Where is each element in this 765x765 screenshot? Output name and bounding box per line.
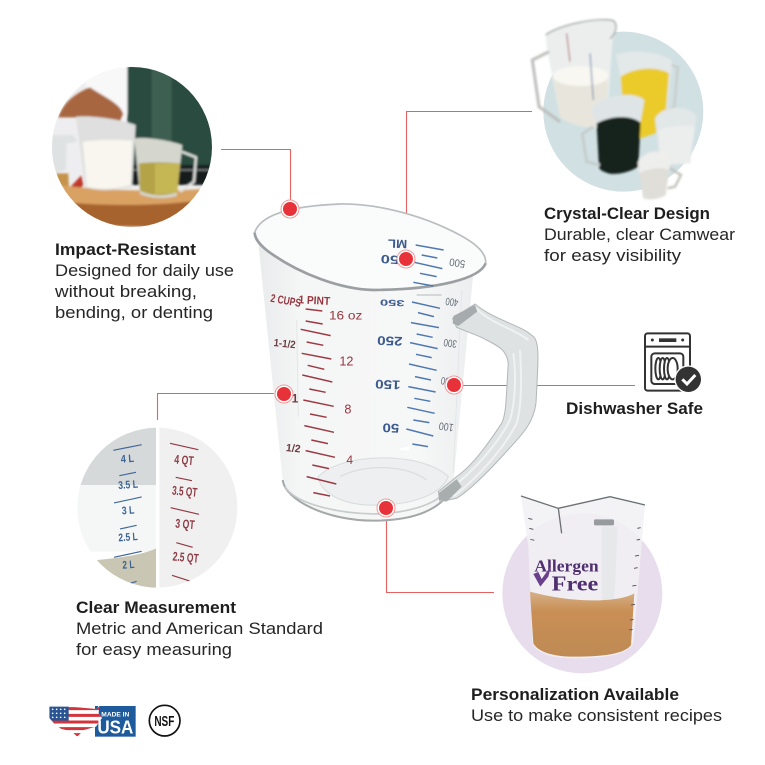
cup handle — [438, 304, 538, 502]
gray cup labels — [438, 255, 466, 433]
text: crystal-clear description: Durable, clear Camwear — [544, 225, 735, 244]
panel: measurement markings close-up — [77, 427, 239, 590]
gray cup labels: 100 — [438, 419, 454, 433]
red cup labels: 1-1/2 — [273, 337, 296, 351]
callout dot: personalization — [377, 499, 395, 517]
blue cup labels: 350 — [379, 297, 405, 308]
callout dot: impact-resistant — [281, 200, 299, 218]
text: clear measurement description: Metric and American Standard — [76, 619, 323, 638]
allergen free mark: Free — [552, 573, 598, 595]
red ticks — [301, 309, 336, 496]
measuring cup — [255, 204, 538, 521]
gray cup labels: 300 — [443, 336, 458, 350]
panel: personalization photo — [502, 496, 662, 673]
text: impact-resistant description — [54, 261, 234, 322]
panel: measurement markings close-up: 3 QT — [175, 517, 195, 532]
text: impact-resistant description: bending, or denting — [55, 303, 213, 322]
red cup labels: 4 — [346, 453, 353, 467]
panel: measurement markings close-up: 2.5 QT — [172, 550, 199, 566]
text: personalization description: Use to make consistent recipes — [471, 706, 722, 725]
heading: Impact-Resistant: Impact-Resistant — [55, 240, 196, 259]
callout dot: crystal-clear — [397, 250, 415, 268]
text: clear measurement description — [76, 619, 323, 659]
gray cup labels: 500 — [448, 255, 466, 270]
icon: dishwasher — [645, 333, 702, 393]
glass cup — [521, 496, 645, 658]
text: crystal-clear description — [544, 225, 735, 265]
red cup labels: 8 — [344, 402, 351, 416]
blue cup labels: ML — [388, 236, 407, 251]
panel: impact-resistant photo — [50, 63, 217, 230]
badge: NSF: NSF — [154, 714, 174, 730]
panel: measurement markings close-up: 3 L — [121, 505, 135, 517]
blue cup labels: 50 — [380, 252, 400, 267]
panel: measurement markings close-up: 2 L — [122, 559, 135, 572]
cup body — [258, 243, 473, 520]
text: crystal-clear description: for easy visibility — [544, 246, 682, 265]
blue cup labels: 250 — [377, 333, 403, 348]
red cup labels: 12 — [339, 354, 353, 368]
badge: made in USA: MADE IN — [101, 713, 129, 719]
panel: measurement markings close-up: 3.5 L — [118, 479, 139, 492]
blue cup labels: 50 — [382, 420, 399, 435]
text: impact-resistant description: without breaking, — [54, 282, 197, 301]
heading: Crystal-Clear Design: Crystal-Clear Design — [544, 204, 710, 223]
red cup labels: 1/2 — [285, 442, 301, 455]
text: impact-resistant description: Designed for daily use — [55, 261, 234, 280]
gray cup labels: 400 — [445, 295, 459, 308]
red cup labels — [269, 293, 362, 467]
panel: measurement markings close-up: 4 QT — [174, 453, 194, 468]
leader lines — [158, 112, 635, 592]
panel: measurement markings close-up: 4 L — [120, 453, 135, 466]
badge: NSF — [149, 705, 180, 736]
allergen free mark — [533, 557, 599, 595]
panel: measurement markings close-up: 2.5 L — [118, 531, 138, 544]
panel: measurement markings close-up: 3.5 QT — [171, 484, 198, 500]
red cup labels: 16 oz — [329, 308, 362, 322]
gray cup labels: 200 — [440, 374, 454, 388]
panel: crystal-clear photo — [532, 20, 703, 199]
text: clear measurement description: for easy measuring — [76, 640, 232, 659]
callout dot: dishwasher — [445, 376, 463, 394]
cup rim — [255, 204, 486, 290]
badge: made in USA: USA — [97, 716, 133, 737]
blue cup labels — [375, 236, 407, 435]
allergen free mark: Allergen — [534, 557, 599, 576]
badge: made in USA — [49, 706, 136, 737]
heading: Clear Measurement: Clear Measurement — [76, 598, 236, 617]
red cup labels: 1 PINT — [298, 294, 330, 308]
blue ticks — [406, 245, 444, 447]
callout dot: measurement — [275, 385, 293, 403]
heading: Dishwasher Safe: Dishwasher Safe — [566, 399, 703, 418]
red cup labels: 2 CUPS — [269, 293, 302, 310]
heading: Personalization Available: Personalization Available — [471, 685, 679, 704]
blue cup labels: 150 — [375, 377, 401, 392]
red cup labels: 1 — [292, 392, 299, 406]
